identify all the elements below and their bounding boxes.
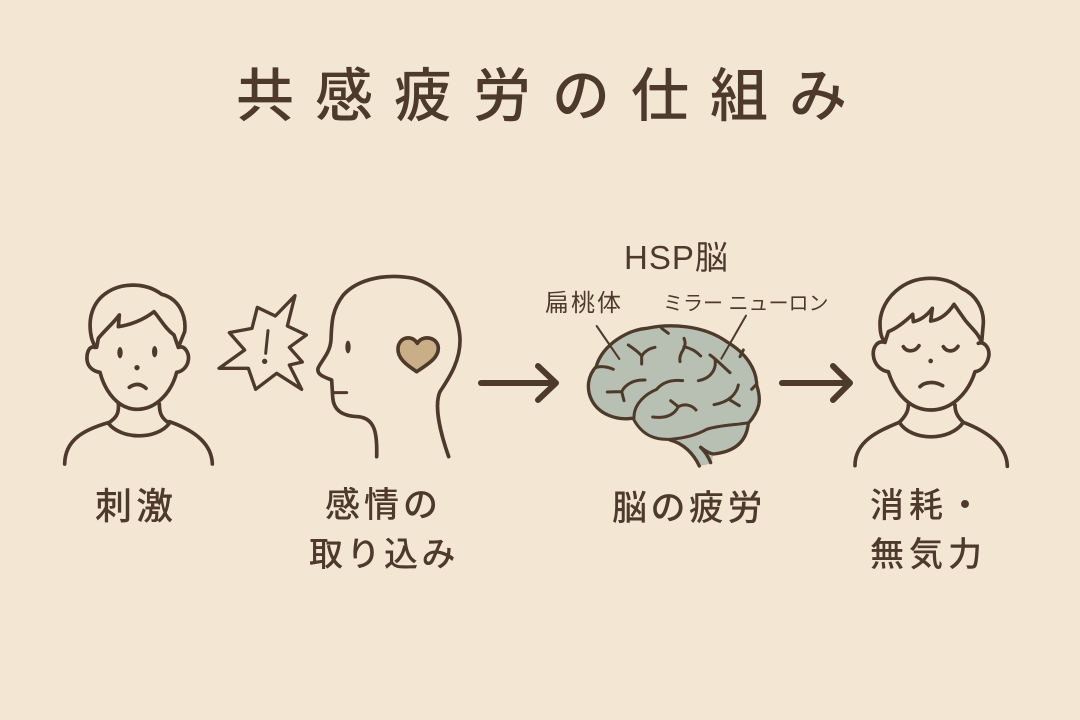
label: stimulus: 刺激	[95, 486, 177, 527]
icon: worried person	[65, 285, 212, 464]
arrow: feeling to brain	[481, 366, 556, 400]
callout line: mirror neurons	[721, 316, 746, 359]
label: exhaustion and apathy: 無気力	[870, 536, 987, 574]
icon: starburst with exclamation	[219, 296, 306, 389]
icon: exhausted person	[855, 278, 1007, 466]
label: amygdala: 扁桃体	[545, 290, 623, 317]
label: mirror neurons: ミラー ニューロン	[663, 293, 829, 315]
callout line: amygdala	[597, 326, 619, 359]
label: exhaustion and apathy	[870, 487, 987, 574]
title: 共感疲労の仕組み	[236, 64, 868, 129]
arrow: brain to exhaustion	[782, 366, 850, 400]
label: taking in emotions: 取り込み	[309, 536, 459, 574]
label: taking in emotions: 感情の	[325, 486, 442, 525]
icon: brain	[588, 316, 759, 466]
heading: HSP brain: HSP脳	[624, 239, 729, 276]
label: taking in emotions	[309, 486, 459, 574]
label: exhaustion and apathy: 消耗・	[870, 487, 987, 525]
icon: head profile with heart	[318, 276, 460, 457]
label: brain fatigue: 脳の疲労	[612, 489, 766, 528]
